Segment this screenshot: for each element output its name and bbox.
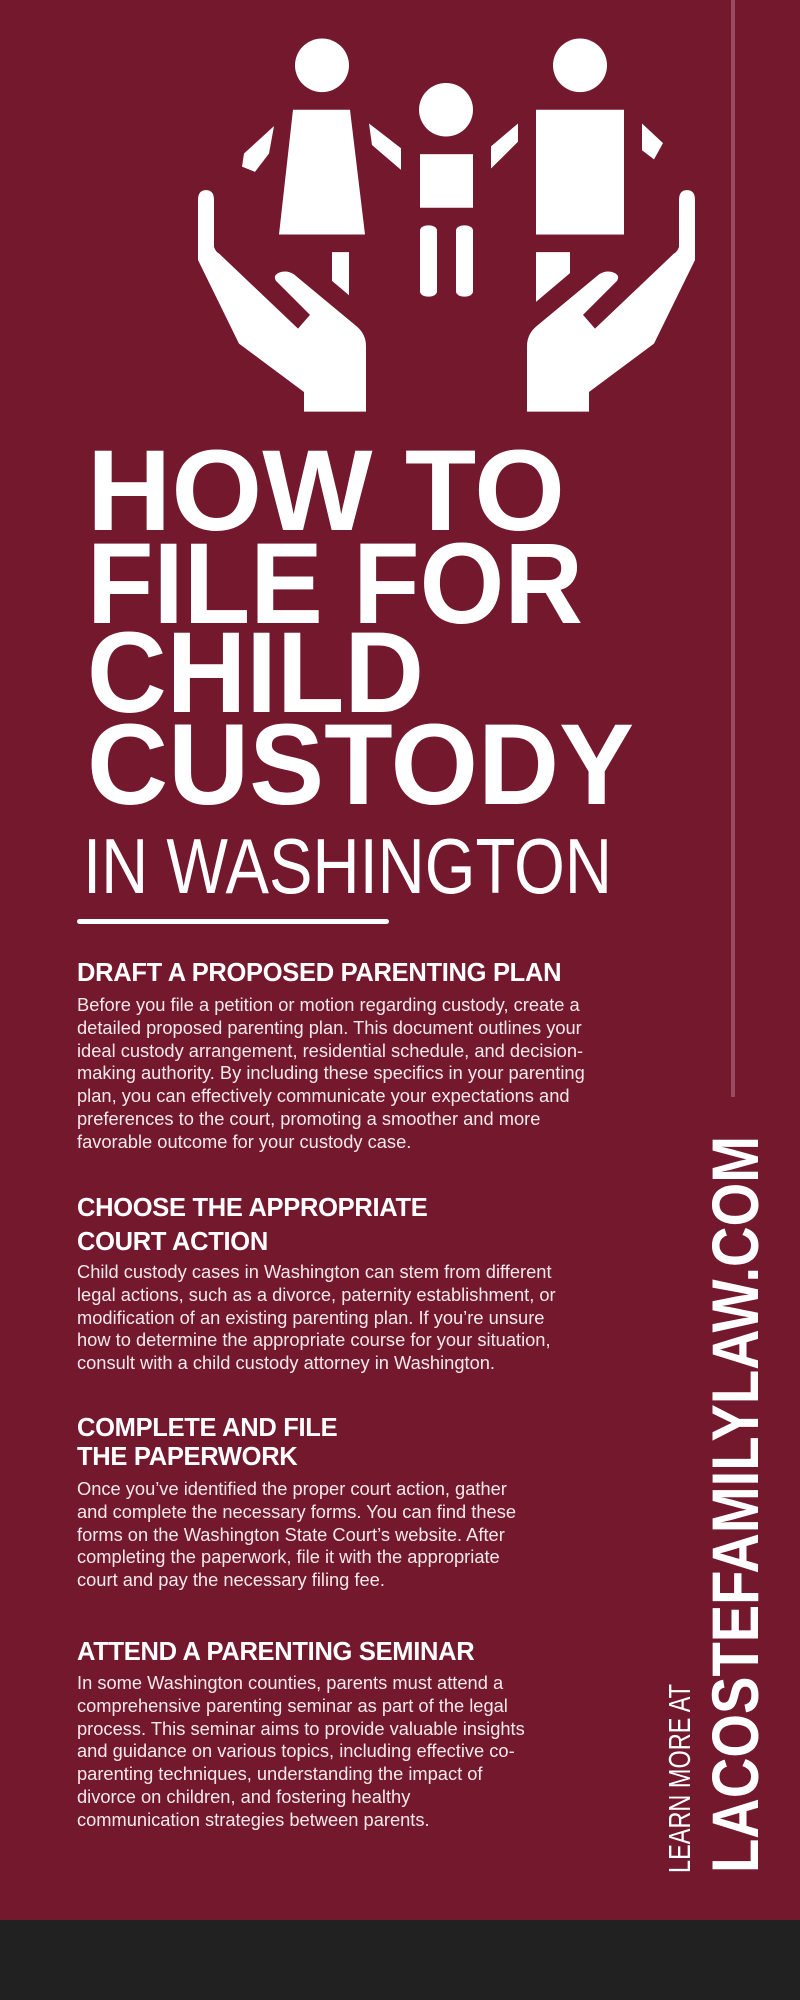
title: FILE FOR — [87, 520, 583, 648]
section 3 text: and complete the necessary forms. You can find these — [77, 1501, 516, 1522]
icon: parent right — [491, 39, 663, 302]
title: CHILD — [87, 609, 424, 737]
subtitle: IN WASHINGTON — [83, 822, 612, 910]
section 3 text — [77, 1478, 516, 1590]
divider bar — [77, 919, 389, 924]
section 3 heading: THE PAPERWORK — [77, 1443, 297, 1471]
section 1 text: Before you file a petition or motion regarding custody, create a — [77, 994, 580, 1015]
title: HOW TO — [87, 430, 565, 555]
icon: parent left — [242, 39, 401, 295]
section 1 text: ideal custody arrangement, residential schedule, and decision- — [77, 1040, 583, 1061]
section 1 text: plan, you can effectively communicate your expectations and — [77, 1085, 570, 1106]
website callout (vertical) — [662, 1136, 772, 1873]
section 2 heading — [77, 1194, 427, 1256]
section 4 heading: ATTEND A PARENTING SEMINAR — [77, 1638, 474, 1666]
title — [83, 430, 634, 910]
website callout (vertical): LEARN MORE AT — [662, 1684, 697, 1873]
section 1 text: preferences to the court, promoting a smoother and more — [77, 1108, 540, 1129]
section 1 text: detailed proposed parenting plan. This document outlines your — [77, 1017, 582, 1038]
section 2 text: Child custody cases in Washington can stem from different — [77, 1261, 552, 1282]
section 4 text — [77, 1672, 525, 1830]
section 1 text: making authority. By including these specifics in your parenting — [77, 1062, 585, 1083]
section 4 text: parenting techniques, understanding the impact of — [77, 1763, 483, 1784]
section 4 text: communication strategies between parents. — [77, 1809, 430, 1830]
section 2 text: modification of an existing parenting plan. If you’re unsure — [77, 1307, 544, 1328]
section 4 text: comprehensive parenting seminar as part of the legal — [77, 1695, 508, 1716]
section 3 text: completing the paperwork, file it with the appropriate — [77, 1546, 500, 1567]
section 4 text: In some Washington counties, parents must attend a — [77, 1672, 503, 1693]
section 2 heading: CHOOSE THE APPROPRIATE — [77, 1194, 427, 1222]
section 2 text: consult with a child custody attorney in Washington. — [77, 1352, 495, 1373]
section 3 heading — [77, 1414, 337, 1471]
section 2 text: legal actions, such as a divorce, paternity establishment, or — [77, 1284, 556, 1305]
section 2 heading: COURT ACTION — [77, 1228, 268, 1256]
icon: family in hands — [198, 38, 695, 412]
section 4 text: process. This seminar aims to provide valuable insights — [77, 1718, 525, 1739]
section 1 text — [77, 994, 585, 1152]
section 3 text: court and pay the necessary filing fee. — [77, 1569, 385, 1590]
icon: left hand — [198, 190, 366, 412]
vertical accent line — [731, 0, 735, 1097]
icon: child — [419, 83, 473, 297]
icon: right hand — [527, 190, 695, 412]
section 3 text: Once you’ve identified the proper court action, gather — [77, 1478, 507, 1499]
section 3 text: forms on the Washington State Court’s website. After — [77, 1524, 505, 1545]
section 2 text: how to determine the appropriate course for your situation, — [77, 1329, 551, 1350]
section 2 text — [77, 1261, 556, 1373]
section 4 text: divorce on children, and fostering healthy — [77, 1786, 410, 1807]
footer band — [0, 1920, 800, 2000]
section 4 text: and guidance on various topics, including effective co- — [77, 1740, 515, 1761]
section 3 heading: COMPLETE AND FILE — [77, 1414, 337, 1442]
section 1 heading: DRAFT A PROPOSED PARENTING PLAN — [77, 959, 561, 987]
section 1 text: favorable outcome for your custody case. — [77, 1131, 411, 1152]
title: CUSTODY — [87, 701, 634, 829]
